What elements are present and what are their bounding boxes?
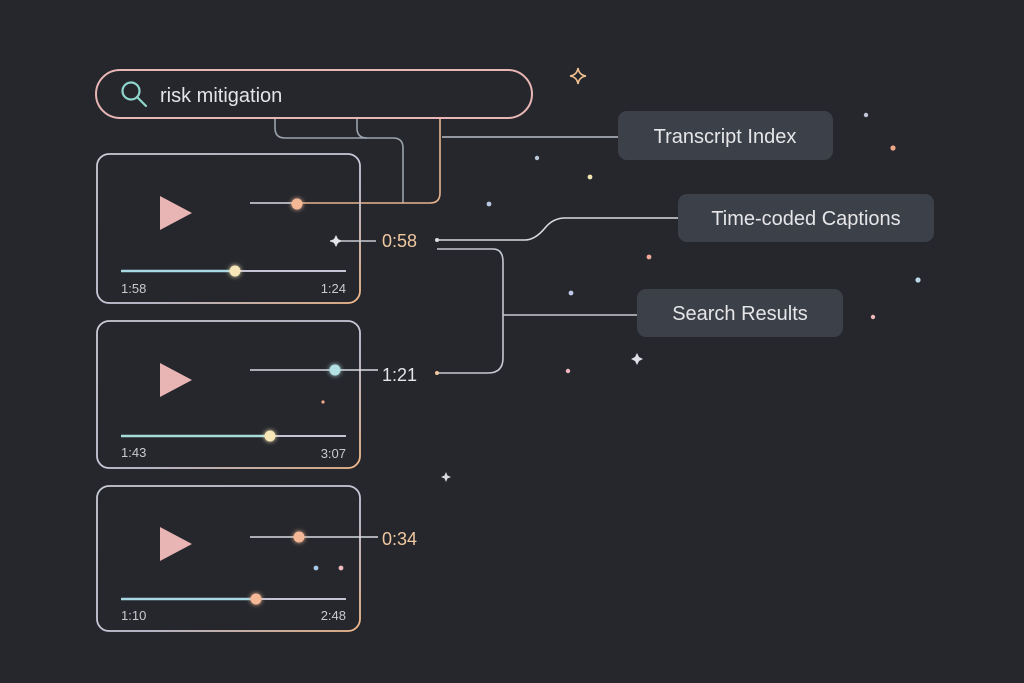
label: Time-coded Captions: [678, 194, 934, 242]
label: Search Results: Search Results: [672, 303, 808, 325]
card 1: [97, 154, 360, 303]
card 3: 1:10: [121, 608, 146, 623]
label: Time-coded Captions: Time-coded Captions: [711, 208, 901, 230]
search bar: risk mitigation: [160, 85, 282, 107]
card 2: 1:43: [121, 445, 146, 460]
icon: magnifier: [122, 82, 146, 106]
timestamp 0:58: 0:58: [382, 231, 417, 251]
card 2: [97, 321, 378, 468]
connectors: search to cards: [275, 118, 678, 373]
timestamp 0:34: 0:34: [382, 529, 417, 549]
card 2: 3:07: [321, 446, 346, 461]
card 3: 2:48: [321, 608, 346, 623]
label: Transcript Index: Transcript Index: [654, 126, 796, 148]
sparkles and dots: [441, 68, 921, 482]
card 1: 1:58: [121, 281, 146, 296]
label: Search Results: [637, 289, 843, 337]
label: Transcript Index: [618, 111, 833, 160]
timestamp 0:58: [330, 231, 439, 251]
search bar: [96, 70, 532, 118]
timestamp 1:21: 1:21: [382, 365, 417, 385]
card 1: 1:24: [321, 281, 346, 296]
timestamp 1:21: [382, 365, 439, 385]
card 3: [97, 486, 378, 631]
